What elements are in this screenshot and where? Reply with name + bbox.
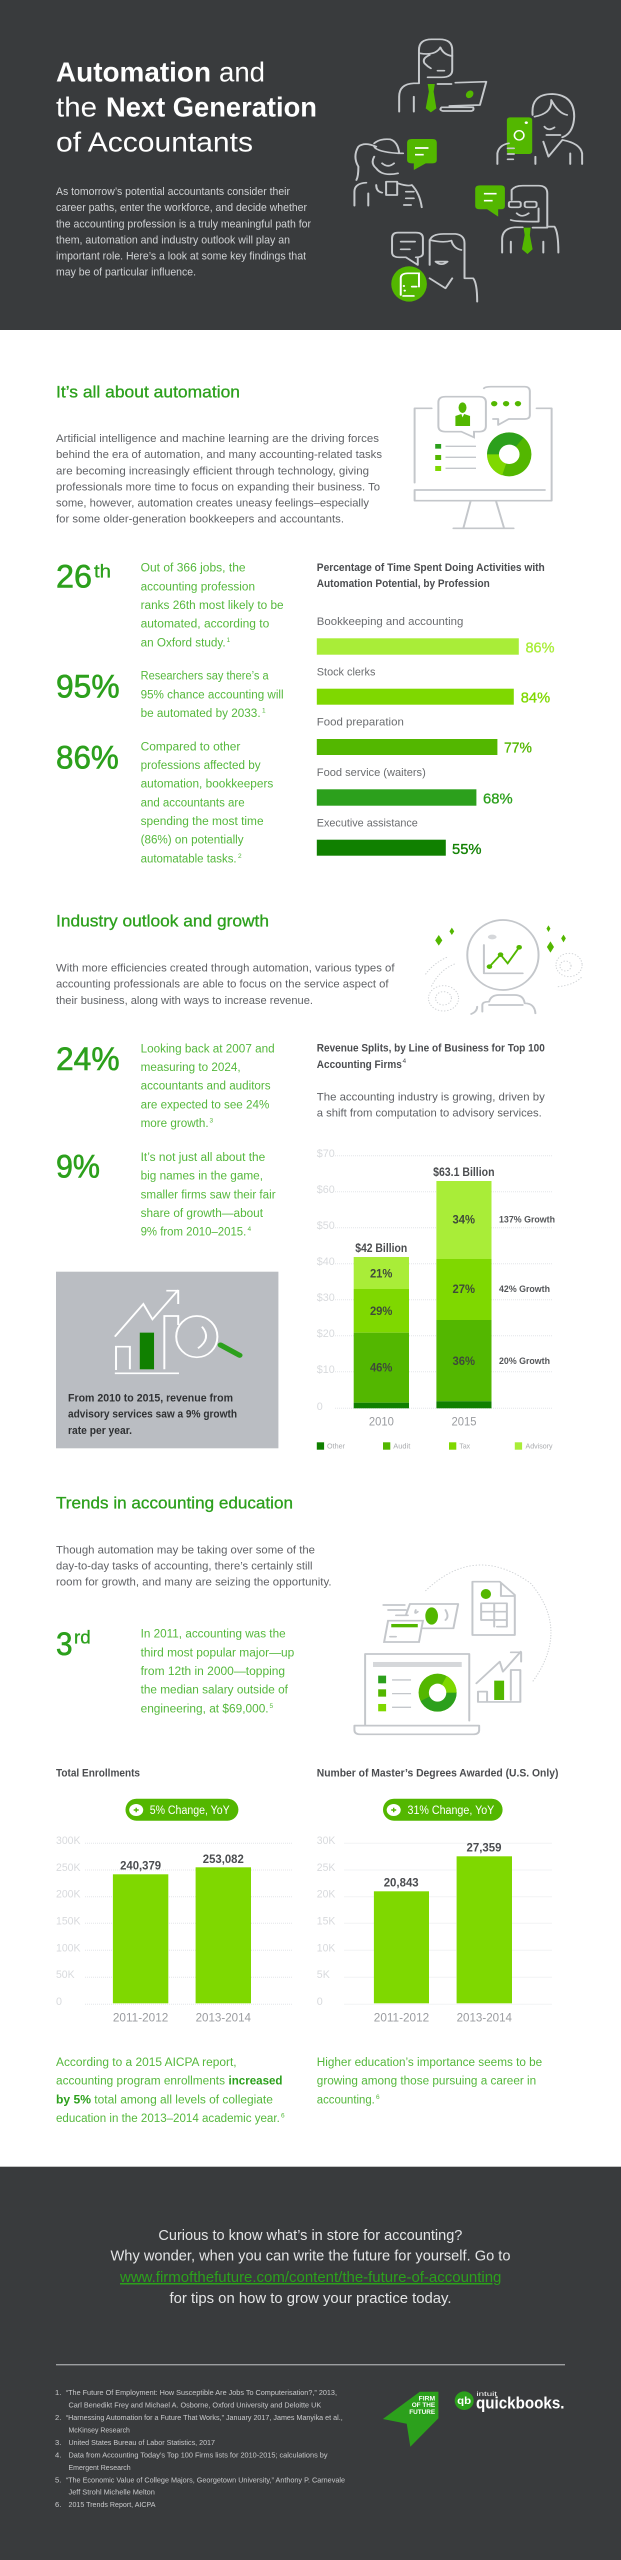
stat: 9% (56, 1148, 276, 1239)
stacked bar: 2015 (433, 1167, 494, 1429)
text: degrees note (317, 2057, 542, 2106)
y axis labels: 300K (56, 1835, 81, 1847)
icon: laptop, money and documents (354, 1565, 551, 1734)
stat: 3rd: In 2011, accounting was the (141, 1629, 286, 1641)
references: “Harnessing Automation for a Future That Works,” January 2017, James Manyika et al., (66, 2413, 343, 2422)
references: 4. (55, 2450, 61, 2459)
stat: 86%: automation, bookkeepers (141, 779, 274, 791)
body text (56, 1544, 332, 1589)
chart: revenue splits (317, 1043, 555, 1450)
logo: Firm of the Future: OF THE (412, 2402, 436, 2409)
stat: 3rd: 3 (56, 1626, 72, 1662)
icon: man with chat bubble and green face (391, 233, 477, 302)
intro text: important role. Here’s a look at some key findings that (56, 251, 306, 263)
text: enrollment note: accounting program enrollments (56, 2076, 225, 2088)
y axis labels: 0 (317, 1996, 323, 2008)
bar: 2013-2014: 27,359 (466, 1843, 502, 1855)
bar chart: time spent by profession (317, 562, 554, 858)
bar: 2011-2012: 240,379 (120, 1861, 161, 1873)
callout text: rate per year. (68, 1425, 132, 1437)
stat: 26th: th (94, 561, 111, 581)
title: Next Generation (106, 92, 317, 123)
stacked bar: 2015: 34% (453, 1212, 475, 1226)
call to action (110, 2227, 510, 2307)
y axis labels: $20 (317, 1328, 335, 1340)
y axis labels: $60 (317, 1184, 335, 1196)
intro text: career paths, enter the workforce, and decide whether (56, 202, 307, 214)
stat: 86%: professions affected by (141, 760, 261, 772)
y axis labels: 20K (317, 1888, 336, 1900)
icon: monitor with chat and donut (415, 387, 552, 528)
bar: bookkeeping: 86% (526, 639, 554, 656)
icon: people with devices (354, 39, 582, 302)
logo: Firm of the Future (383, 2392, 438, 2447)
chart title: Revenue Splits, by Line of Business for Top 100 (317, 1043, 545, 1055)
references: 5. (55, 2475, 61, 2484)
bar: stock clerks: Stock clerks (317, 666, 376, 678)
callout text (68, 1392, 237, 1437)
growth labels: 20% Growth (499, 1356, 550, 1367)
bar: food service (317, 767, 513, 807)
stat: 9%: 4 (248, 1226, 252, 1233)
chart description (317, 1091, 545, 1119)
callout text: advisory services saw a 9% growth (68, 1409, 237, 1421)
references: McKinsey Research (68, 2425, 130, 2434)
y axis labels: 0 (317, 1401, 323, 1413)
badge: 5% change: 5% Change, YoY (150, 1805, 230, 1817)
intro text: the accounting profession is a truly meaningful path for (56, 218, 311, 230)
chart description: a shift from computation to advisory services. (317, 1107, 542, 1119)
bar: 2013-2014: 253,082 (203, 1854, 244, 1866)
stat: 9%: 9% from 2010–2015. (141, 1227, 246, 1239)
y axis labels: 200K (56, 1888, 81, 1900)
references: “The Economic Value of College Majors, Georgetown University,” Anthony P. Carnevale (66, 2475, 345, 2484)
icon: chart with magnifier (115, 1290, 240, 1373)
text: enrollment note (56, 2057, 285, 2125)
stat: 24%: accountants and auditors (141, 1081, 271, 1093)
bar: food service: Food service (waiters) (317, 767, 426, 779)
call to action: Curious to know what’s in store for accounting? (158, 2227, 462, 2244)
call to action: www.firmofthefuture.com/content/the-future-of-accounting (119, 2269, 501, 2286)
y axis labels: $50 (317, 1220, 335, 1232)
text: degrees note: accounting. (317, 2094, 375, 2106)
bar: executive assistance (317, 817, 482, 858)
references (55, 2388, 345, 2509)
heading: Trends in accounting education (56, 1493, 293, 1512)
stat: 3rd: 5 (270, 1703, 274, 1710)
stat: 26th (56, 558, 284, 649)
bar: 2011-2012 (113, 1861, 169, 2025)
text: enrollment note: education in the 2013–2014 academic year. (56, 2113, 280, 2125)
references: 2015 Trends Report, AICPA (68, 2500, 156, 2509)
title: and (219, 57, 265, 88)
body text: their business, along with ways to increase revenue. (56, 995, 313, 1007)
body text: With more efficiencies created through automation, various types of (56, 963, 395, 975)
stat: 26th: an Oxford study. (141, 637, 226, 649)
text: enrollment note: total among all levels of collegiate (94, 2094, 273, 2106)
stat: 95%: be automated by 2033. (141, 708, 261, 720)
stat: 86%: automatable tasks. (141, 853, 237, 865)
stat: 24%: Looking back at 2007 and (141, 1043, 275, 1055)
heading: It’s all about automation (56, 382, 240, 401)
references: Emergent Research (68, 2463, 131, 2472)
bar: food preparation: 77% (504, 740, 532, 757)
references: Jeff Strohl Michelle Melton (68, 2488, 155, 2497)
y axis labels: 150K (56, 1915, 81, 1927)
stat: 86%: spending the most time (141, 816, 264, 828)
stat: 24% (56, 1041, 275, 1130)
y axis labels: 15K (317, 1915, 336, 1927)
stat: 9%: smaller firms saw their fair (141, 1189, 276, 1201)
logo: intuit quickbooks: quickbooks. (476, 2393, 564, 2412)
y axis labels: $30 (317, 1292, 335, 1304)
stat: 3rd: third most popular major—up (141, 1647, 294, 1659)
logo: Firm of the Future: FIRM (419, 2396, 435, 2402)
bar: executive assistance: Executive assistance (317, 817, 418, 829)
bar: stock clerks: 84% (521, 690, 550, 707)
references: 1. (55, 2388, 61, 2397)
stat: 26th: 1 (226, 637, 230, 644)
title: the (56, 92, 97, 123)
stat: 9%: It’s not just all about the (141, 1152, 265, 1164)
text: enrollment note: According to a 2015 AICPA report, (56, 2057, 237, 2069)
y axis labels: 5K (317, 1969, 330, 1981)
intro text: may be of particular influence. (56, 267, 196, 279)
text: enrollment note: 6 (281, 2112, 285, 2120)
stat: 3rd (56, 1626, 294, 1715)
y axis labels: 100K (56, 1942, 81, 1954)
stacked bar: 2010: $42 Billion (355, 1243, 407, 1255)
bar: 2011-2012: 2011-2012 (374, 2011, 430, 2025)
stacked bar: 2010: 21% (370, 1266, 393, 1280)
y axis labels: 0 (56, 1996, 62, 2008)
stat: 9%: share of growth—about (141, 1208, 264, 1220)
badge: 31% change: 31% Change, YoY (408, 1805, 495, 1817)
icon: man with laptop (399, 39, 486, 112)
body text: some, however, automation creates uneasy feelings–especially (56, 498, 369, 510)
icon: woman with ponytail and chat bubble (354, 139, 437, 207)
stat: 26th: 26 (56, 558, 92, 594)
icon: crystal ball with chart (426, 920, 582, 1014)
text: enrollment note: by 5% (56, 2094, 91, 2106)
chart: total enrollments (56, 1768, 292, 2025)
stacked bar: 2015: $63.1 Billion (433, 1167, 494, 1179)
heading: Industry outlook and growth (56, 912, 269, 931)
stat: 95%: 95% chance accounting will (141, 689, 284, 701)
bar: 2013-2014: 2013-2014 (196, 2011, 251, 2025)
references: United States Bureau of Labor Statistics, 2017 (68, 2438, 215, 2447)
stat: 24%: 24% (56, 1041, 120, 1077)
stat: 3rd: engineering, at $69,000. (141, 1703, 269, 1715)
stat: 86% (56, 739, 274, 865)
growth labels: 42% Growth (499, 1284, 550, 1295)
body text: Though automation may be taking over some of the (56, 1544, 315, 1556)
body text: room for growth, and many are seizing the opportunity. (56, 1577, 332, 1589)
y axis labels: 30K (317, 1835, 336, 1847)
stat: 3rd: from 12th in 2000—topping (141, 1666, 285, 1678)
body text: Artificial intelligence and machine learning are the driving forces (56, 433, 380, 445)
section: It's all about automation (56, 382, 552, 528)
chart description: The accounting industry is growing, driven by (317, 1091, 545, 1103)
callout text: From 2010 to 2015, revenue from (68, 1392, 233, 1404)
y axis labels: $10 (317, 1364, 335, 1376)
stacked bar: 2015: 27% (453, 1282, 475, 1296)
y axis labels (317, 1148, 335, 1413)
bar: executive assistance: 55% (452, 841, 482, 858)
intro text (56, 186, 311, 279)
bar: 2013-2014 (457, 1843, 512, 2025)
legend (317, 1441, 553, 1450)
chart title (317, 1043, 545, 1071)
bar: 2011-2012 (374, 1878, 430, 2025)
y axis labels (317, 1835, 336, 2008)
badge: 5% change (126, 1799, 238, 1821)
bar: bookkeeping (317, 616, 554, 656)
chart title (317, 562, 545, 590)
bar: 2013-2014 (196, 1854, 251, 2025)
text: degrees note: Higher education’s importance seems to be (317, 2057, 542, 2069)
stat: 26th: Out of 366 jobs, the (141, 563, 246, 575)
section: Industry outlook and growth (56, 912, 582, 1014)
stacked bar: 2015: 36% (453, 1354, 475, 1368)
y axis labels: 50K (56, 1969, 75, 1981)
stat: 95%: 1 (262, 708, 266, 714)
body text: behind the era of automation, and many accounting-related tasks (56, 449, 383, 461)
references: “The Future Of Employment: How Susceptible Are Jobs To Computerisation?,” 2013, (66, 2388, 337, 2397)
stat: 24%: 3 (210, 1118, 214, 1124)
title: Automation (56, 57, 211, 88)
body text: for some older-generation bookkeepers and accountants. (56, 514, 344, 526)
text: degrees note: growing among those pursuing a career in (317, 2076, 536, 2088)
bar: food preparation (317, 717, 532, 757)
text: degrees note: 6 (376, 2094, 380, 2101)
stat: 86%: Compared to other (141, 741, 241, 753)
references: 2. (55, 2413, 61, 2422)
stat: 9%: 9% (56, 1148, 100, 1184)
legend: Audit (393, 1441, 411, 1450)
bar: 2013-2014: 2013-2014 (457, 2011, 512, 2025)
references: Data from Accounting Today’s Top 100 Firms lists for 2010-2015; calculations by (68, 2450, 328, 2459)
references: 3. (55, 2438, 61, 2447)
stacked bar: 2010: 46% (370, 1361, 393, 1375)
stacked bar: 2010: 2010 (369, 1415, 394, 1429)
stacked bar: 2015: 2015 (452, 1415, 477, 1429)
body text: accounting professionals are able to focus on the service aspect of (56, 979, 389, 991)
body text: day-to-day tasks of accounting, there’s certainly still (56, 1560, 312, 1572)
bar: food service: 68% (483, 790, 513, 807)
title: of Accountants (56, 127, 253, 158)
stat: 26th: automated, according to (141, 619, 269, 631)
logo: intuit quickbooks: intuit (476, 2391, 497, 2398)
chart title: Number of Master’s Degrees Awarded (U.S. Only) (317, 1768, 559, 1780)
stat: 86%: (86%) on potentially (141, 835, 244, 847)
stat: 95%: Researchers say there’s a (141, 671, 269, 683)
growth labels (495, 1211, 555, 1368)
y axis labels: $70 (317, 1148, 335, 1160)
text: enrollment note: increased (228, 2076, 282, 2088)
stat: 24%: more growth. (141, 1118, 209, 1130)
body text: professionals more time to focus on expanding their business. To (56, 481, 380, 493)
references: Carl Benedikt Frey and Michael A. Osborne, Oxford University and Deloitte UK (68, 2401, 321, 2410)
bar: bookkeeping: Bookkeeping and accounting (317, 616, 463, 628)
chart title: Percentage of Time Spent Doing Activities with (317, 562, 545, 574)
logo: Firm of the Future: FUTURE (409, 2409, 436, 2416)
body text: are becoming increasingly efficient through technology, giving (56, 465, 369, 477)
bar: food preparation: Food preparation (317, 717, 404, 729)
title (56, 57, 317, 158)
stat: 26th: accounting profession (141, 581, 255, 593)
legend: Tax (459, 1441, 470, 1450)
call to action: Why wonder, when you can write the future for yourself. Go to (110, 2248, 510, 2265)
chart title: Accounting Firms (317, 1059, 402, 1071)
stacked bar: 2010: 29% (370, 1304, 393, 1318)
references: 6. (55, 2500, 61, 2509)
body text (56, 433, 383, 526)
logo: intuit quickbooks: qb (457, 2396, 471, 2407)
stat: 95%: 95% (56, 668, 120, 704)
bar: 2011-2012: 20,843 (384, 1878, 419, 1890)
body text (56, 963, 395, 1007)
icon: man with glasses and chat bubble (475, 185, 558, 254)
intro text: As tomorrow’s potential accountants consider their (56, 186, 290, 198)
stat: 3rd: the median salary outside of (141, 1685, 289, 1697)
growth labels: 137% Growth (499, 1214, 555, 1225)
y axis labels: $40 (317, 1256, 335, 1268)
chart title: Automation Potential, by Profession (317, 578, 490, 590)
y axis labels: 250K (56, 1862, 81, 1874)
panel: header (0, 0, 621, 330)
chart: master's degrees awarded (317, 1768, 559, 2025)
stat: 95% (56, 668, 284, 720)
bar: stock clerks (317, 666, 550, 707)
chart title: Total Enrollments (56, 1768, 140, 1780)
stacked bar: 2010 (354, 1243, 409, 1429)
call to action: for tips on how to grow your practice today. (170, 2290, 452, 2307)
section: Trends in accounting education (56, 1493, 551, 1734)
stat: 26th: ranks 26th most likely to be (141, 600, 284, 612)
chart title: 4 (402, 1058, 406, 1065)
panel: footer (0, 2167, 621, 2560)
bar: 2011-2012: 2011-2012 (113, 2011, 169, 2025)
stat: 86%: 2 (238, 853, 242, 860)
legend: Advisory (526, 1441, 553, 1450)
badge: 31% change (383, 1799, 503, 1821)
y axis labels: 10K (317, 1942, 336, 1954)
stat: 24%: are expected to see 24% (141, 1099, 269, 1111)
y axis labels: 25K (317, 1862, 336, 1874)
callout: advisory growth (56, 1272, 278, 1448)
stat: 9%: big names in the game, (141, 1171, 263, 1183)
intro text: them, automation and industry outlook will play an (56, 234, 290, 246)
stat: 3rd: rd (74, 1627, 91, 1647)
stat: 86%: 86% (56, 739, 119, 775)
legend: Other (327, 1441, 345, 1450)
stat: 24%: measuring to 2024, (141, 1062, 241, 1074)
logo: intuit quickbooks (455, 2391, 564, 2412)
stat: 86%: and accountants are (141, 797, 245, 809)
y axis labels (56, 1835, 81, 2008)
icon: woman with phone (497, 94, 582, 164)
